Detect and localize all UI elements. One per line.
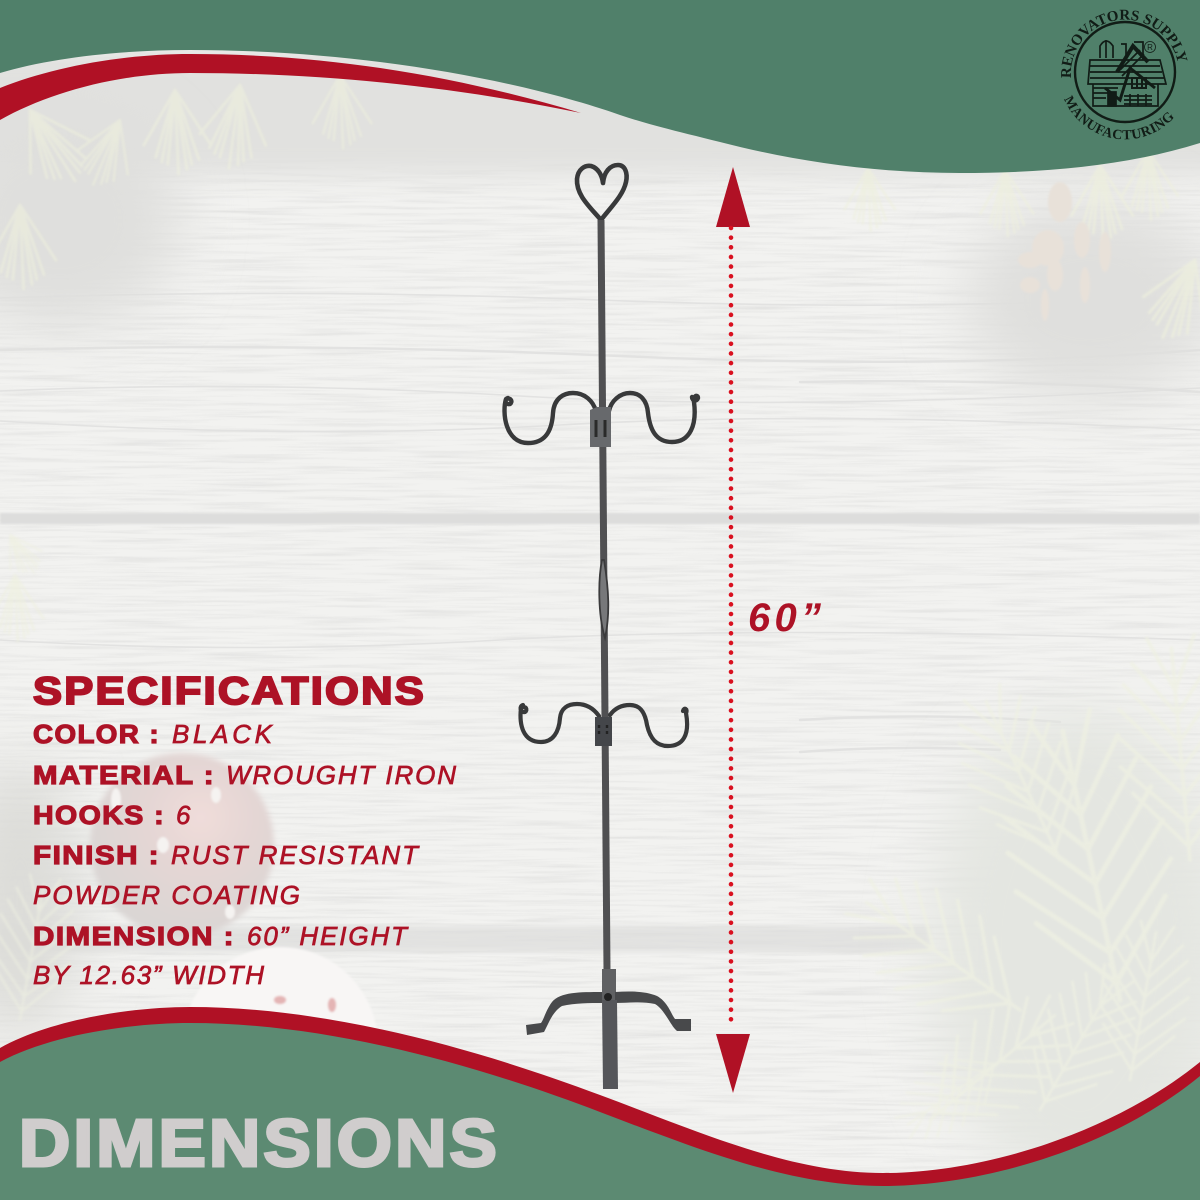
color row: BLACK bbox=[172, 719, 274, 749]
finish row bbox=[33, 840, 420, 910]
material row bbox=[33, 760, 456, 790]
material row: MATERIAL : bbox=[33, 760, 215, 790]
red ornament bbox=[90, 753, 274, 937]
dimensions title: DIMENSIONS bbox=[19, 1106, 500, 1181]
logo: Renovators Supply Manufacturing bbox=[1061, 10, 1188, 140]
product: wrought iron stand bbox=[505, 165, 698, 1089]
decorative pine foliage and cone, top right bbox=[845, 150, 1200, 351]
bottom green wave bbox=[0, 1023, 1200, 1200]
up arrowhead bbox=[716, 167, 750, 227]
top green wave bbox=[0, 0, 1200, 173]
logo lettering top: RENOVATORS SUPPLY bbox=[1061, 10, 1188, 78]
faint ornaments behind the specifications bbox=[0, 753, 378, 1143]
decorative pine foliage, bottom right bbox=[827, 631, 1200, 1156]
bottom red wave band bbox=[0, 1007, 1200, 1200]
hooks row: 6 bbox=[176, 800, 191, 830]
specifications block bbox=[33, 670, 456, 990]
main pole bbox=[601, 220, 607, 970]
dimension row: BY 12.63” WIDTH bbox=[33, 960, 264, 990]
color row bbox=[33, 719, 274, 749]
pine cone bbox=[1018, 182, 1111, 321]
left shadow bbox=[0, 110, 180, 330]
pine sprig, lower left bbox=[0, 870, 84, 1027]
decorative pine foliage, top left bbox=[0, 75, 372, 642]
heart topper bbox=[577, 165, 627, 220]
color row: COLOR : bbox=[33, 719, 160, 749]
finish row: RUST RESISTANT bbox=[171, 840, 420, 870]
logo house bbox=[1088, 40, 1166, 106]
height dimension arrow bbox=[716, 167, 750, 1093]
finish row: POWDER COATING bbox=[33, 880, 300, 910]
height label: 60” bbox=[748, 596, 821, 640]
ornament spots bbox=[274, 996, 336, 1012]
down arrowhead bbox=[716, 1034, 750, 1093]
soft shadow right bbox=[965, 200, 1200, 400]
dimension row bbox=[33, 921, 409, 990]
logo ring bbox=[1075, 22, 1175, 122]
lower hooks bbox=[521, 704, 687, 746]
registered mark: R bbox=[1147, 43, 1153, 52]
foliage shadow bottom left bbox=[0, 760, 80, 1040]
dimension row: 60” HEIGHT bbox=[247, 921, 409, 951]
logo lettering bottom: MANUFACTURING bbox=[1064, 94, 1174, 140]
centre twist bbox=[599, 560, 608, 638]
dimension row: DIMENSION : bbox=[33, 921, 235, 951]
upper hooks bbox=[505, 393, 698, 447]
tripod base bbox=[526, 969, 691, 1089]
finish row: FINISH : bbox=[33, 840, 160, 870]
plank seams bbox=[0, 513, 1200, 952]
hooks row: HOOKS : bbox=[33, 800, 165, 830]
pine sprigs bbox=[845, 150, 1200, 351]
dotted line bbox=[729, 228, 733, 1028]
top shadow band bbox=[0, 50, 1200, 175]
specifications heading: SPECIFICATIONS bbox=[33, 670, 426, 713]
top red swoosh bbox=[0, 54, 581, 120]
foliage shadow bottom right bbox=[930, 710, 1200, 1190]
material row: WROUGHT IRON bbox=[226, 760, 456, 790]
white ornament bbox=[182, 947, 378, 1143]
